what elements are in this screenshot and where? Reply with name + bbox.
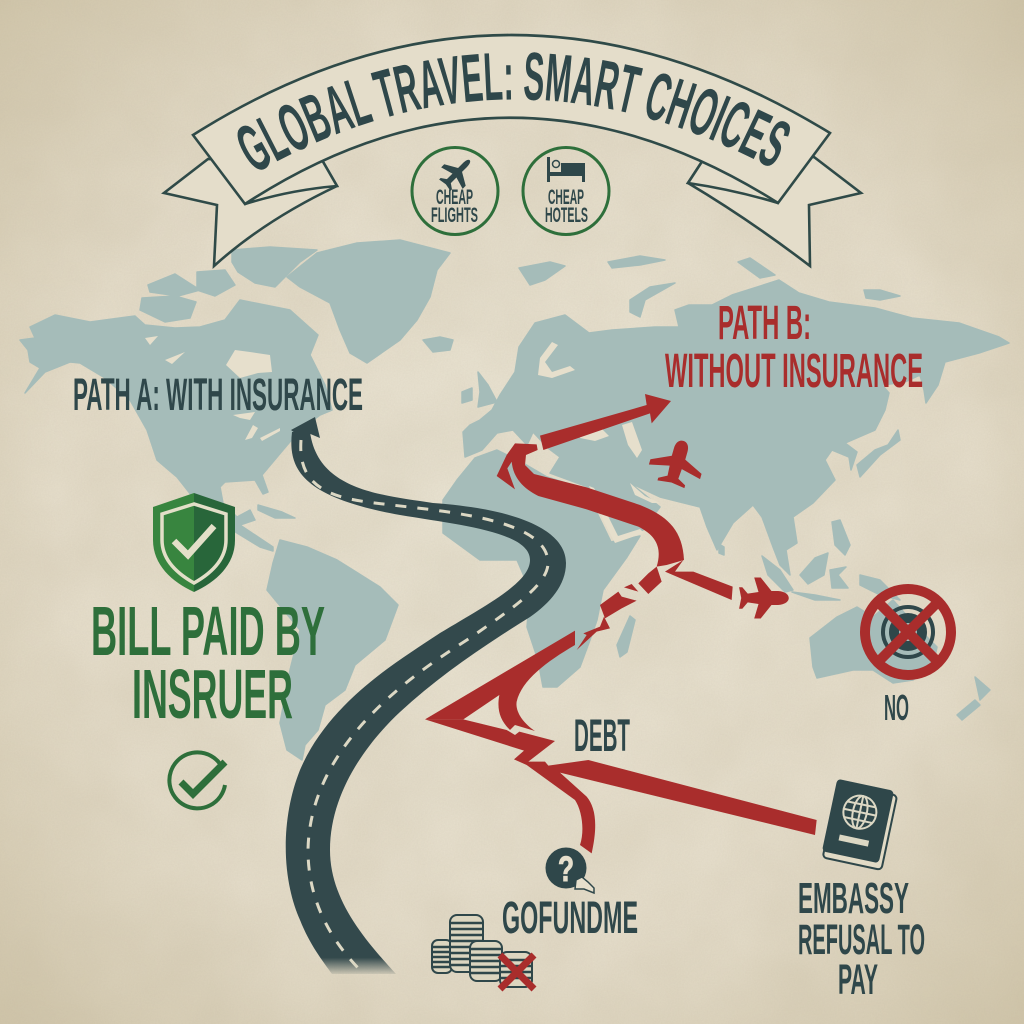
map: Red Sea and Gulf of Aden bbox=[589, 486, 644, 543]
world map bbox=[20, 240, 1009, 760]
icon: shield with check bbox=[153, 493, 235, 592]
banner: title ribbon bbox=[164, 35, 861, 266]
heading: path B: PATH B: bbox=[718, 297, 811, 350]
route: branch to plane bbox=[665, 560, 733, 600]
map: South America bbox=[267, 540, 398, 760]
text: DEBT bbox=[574, 710, 630, 761]
icon: coin stacks bbox=[432, 915, 534, 989]
map: Hudson Bay and Great Lakes bbox=[145, 336, 280, 441]
map: Caribbean bbox=[258, 505, 295, 518]
route: lower zig-zag and passport band bbox=[425, 719, 817, 853]
badge: cheap hotels: CHEAP bbox=[548, 186, 584, 209]
route: cracked fragments bbox=[577, 567, 662, 650]
callout: bill paid by insurer: INSRUER bbox=[132, 655, 293, 733]
icon: red plane right bbox=[739, 577, 789, 619]
label: cheap: CHEAP bbox=[436, 186, 473, 209]
heading: path B bbox=[665, 297, 923, 398]
banner right fold bbox=[688, 160, 778, 203]
coin stack 4 bbox=[500, 952, 532, 987]
label: gofundme: GOFUNDME bbox=[502, 892, 638, 943]
path B: broken red route bbox=[425, 394, 817, 853]
coin stack 3 bbox=[470, 941, 502, 981]
icon: crossed-out target bbox=[865, 589, 951, 675]
icon: airplane bbox=[434, 150, 480, 196]
map: Africa bbox=[443, 450, 640, 687]
title: GLOBAL TRAVEL: SMART CHOICES bbox=[238, 52, 790, 170]
label: flights: FLIGHTS bbox=[431, 204, 478, 227]
map: Australia bbox=[810, 600, 937, 683]
map: Madagascar bbox=[617, 616, 635, 657]
label: embassy refusal to pay bbox=[798, 874, 925, 1004]
map: New Zealand bbox=[957, 677, 990, 720]
text: NO bbox=[884, 687, 909, 728]
banner right tail bbox=[688, 157, 861, 266]
icon: passport bbox=[821, 779, 898, 870]
map: Eurasia bbox=[463, 280, 1009, 575]
callout: bill paid by insurer: BILL PAID BY bbox=[91, 592, 325, 670]
banner main arc bbox=[193, 35, 830, 204]
route: upper zig-zag strip bbox=[425, 631, 575, 731]
map: Greenland bbox=[287, 240, 450, 363]
badge: cheap hotels bbox=[523, 148, 609, 234]
map: Sri Lanka and Japan bbox=[719, 430, 900, 555]
icon: question bubble: ? bbox=[558, 850, 574, 889]
passport globe bbox=[840, 793, 879, 832]
road: path A bbox=[286, 417, 566, 974]
map: Arctic Russian islands and Svalbard bbox=[519, 256, 900, 317]
route: upper arrow bbox=[540, 394, 671, 450]
map: Indonesia and Philippines bbox=[762, 520, 900, 600]
icon: bed bbox=[547, 157, 585, 182]
coin stack 1 bbox=[432, 940, 452, 973]
icon: question bubble bbox=[546, 848, 594, 893]
map: North America bbox=[20, 300, 332, 551]
label: embassy refusal to pay: EMBASSY bbox=[798, 874, 909, 923]
label: hotels: HOTELS bbox=[545, 204, 588, 227]
map: Iceland bbox=[423, 337, 453, 352]
route: hook and S-curve bbox=[497, 443, 684, 567]
passport label bar bbox=[839, 835, 869, 847]
road arrowhead bbox=[291, 417, 320, 438]
label: embassy refusal to pay: PAY bbox=[838, 956, 878, 1004]
map: Baltic Black and Caspian seas bbox=[538, 342, 660, 503]
icon: red cross bbox=[500, 955, 534, 989]
banner left fold bbox=[245, 160, 337, 204]
banner left tail bbox=[164, 159, 337, 266]
icon: green check circle bbox=[169, 752, 225, 808]
road centre dashes bbox=[301, 440, 548, 972]
coin stack 2 bbox=[450, 915, 483, 972]
badge: cheap flights bbox=[412, 148, 498, 234]
map: Britain and Ireland bbox=[462, 372, 497, 407]
text: PATH A: WITH INSURANCE bbox=[73, 369, 363, 420]
map: Canadian Arctic islands bbox=[140, 247, 317, 322]
callout: bill paid by insurer bbox=[91, 592, 325, 733]
icon: red plane upper bbox=[645, 434, 709, 492]
